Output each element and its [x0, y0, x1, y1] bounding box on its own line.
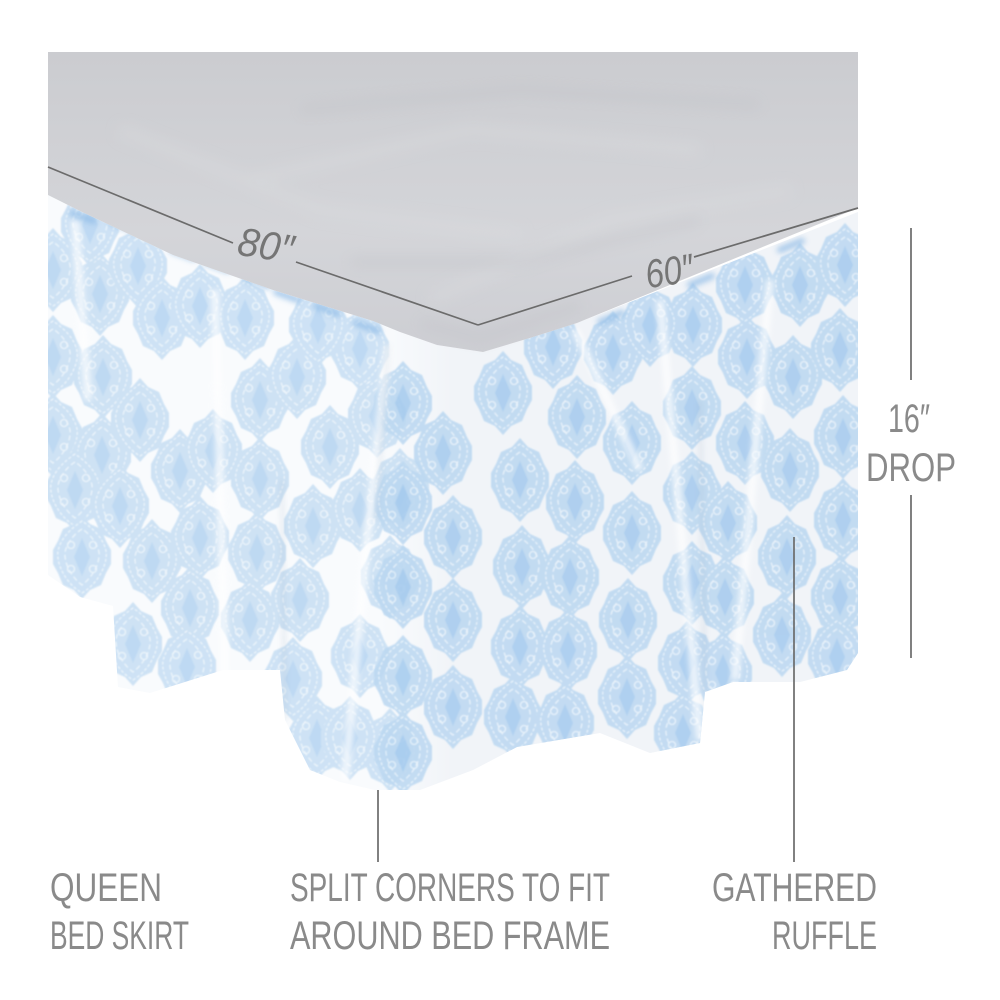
- dimension: 16 inch drop: DROP: [866, 446, 956, 490]
- right panel pattern: [374, 223, 874, 795]
- fold highlights: [75, 220, 770, 780]
- dimension: 16 inch drop: [866, 228, 956, 658]
- dimension: 80 inch: 80″: [235, 220, 299, 272]
- gathered ruffle marks: [72, 213, 802, 331]
- fold shadows: [282, 345, 705, 720]
- left panel pattern: [24, 183, 429, 792]
- label: queen bed skirt: [50, 866, 189, 958]
- label: queen bed skirt: BED SKIRT: [50, 914, 189, 958]
- label: gathered ruffle: GATHERED: [712, 866, 877, 910]
- dimension: 80 inch: [48, 167, 478, 325]
- label: split corners: AROUND BED FRAME: [290, 914, 610, 958]
- label: gathered ruffle: [712, 866, 877, 958]
- label: split corners: [290, 866, 610, 958]
- bed skirt fabric: [24, 183, 874, 800]
- dimension: 60 inch: [478, 208, 858, 325]
- mattress top: [48, 52, 858, 352]
- dimension: 60 inch: 60″: [642, 246, 698, 297]
- label: gathered ruffle: RUFFLE: [772, 914, 877, 958]
- label: queen bed skirt: QUEEN: [50, 866, 162, 910]
- label: split corners: SPLIT CORNERS TO FIT: [290, 866, 610, 910]
- callout line: split corner: [377, 790, 379, 862]
- dimension: 16 inch drop: 16″: [888, 397, 930, 441]
- callout line: gathered ruffle: [793, 537, 795, 862]
- right side shading: [380, 200, 860, 800]
